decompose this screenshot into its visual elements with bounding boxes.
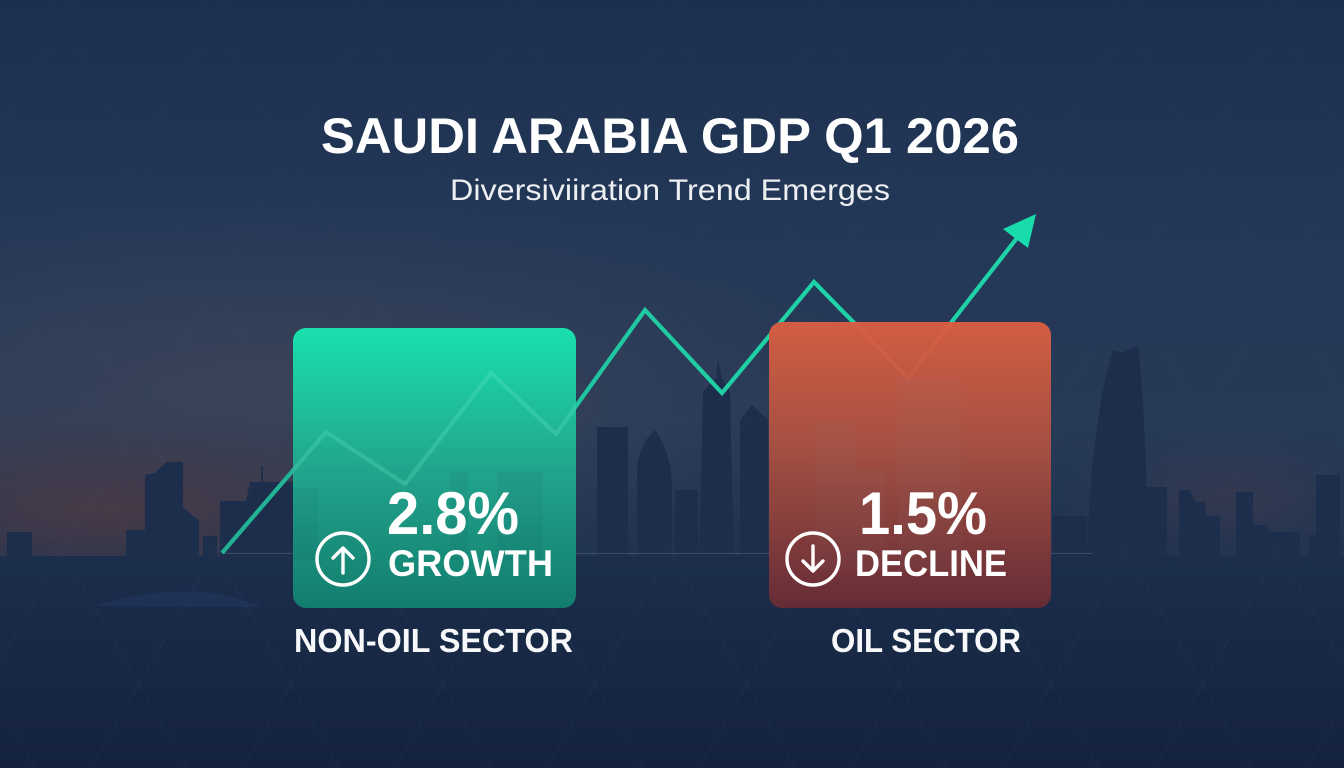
subtitle: Diversiviiration Trend Emerges — [450, 174, 890, 207]
icon: down arrow in circle — [787, 533, 839, 585]
value: 1.5%: 1.5% — [859, 480, 987, 547]
faint skyline and trend line seen through card — [293, 370, 576, 487]
label: decline: DECLINE — [855, 543, 1007, 584]
panel: oil sector decline card — [769, 322, 1051, 608]
faint skyline and trend line seen through card — [886, 358, 926, 378]
arrowhead — [1003, 214, 1036, 248]
icon: up arrow in circle — [317, 533, 369, 585]
horizon line — [222, 553, 1092, 554]
title: SAUDI ARABIA GDP Q1 2026 — [321, 108, 1019, 164]
label: growth: GROWTH — [388, 543, 553, 584]
panel: non-oil sector growth card — [293, 328, 576, 608]
trend line with arrow — [222, 214, 1036, 553]
label: non-oil sector: NON-OIL SECTOR — [294, 622, 573, 659]
value: 2.8%: 2.8% — [387, 480, 519, 547]
city skyline silhouette — [0, 345, 1344, 768]
label: oil sector: OIL SECTOR — [831, 622, 1021, 659]
waterfront dome — [95, 592, 262, 607]
